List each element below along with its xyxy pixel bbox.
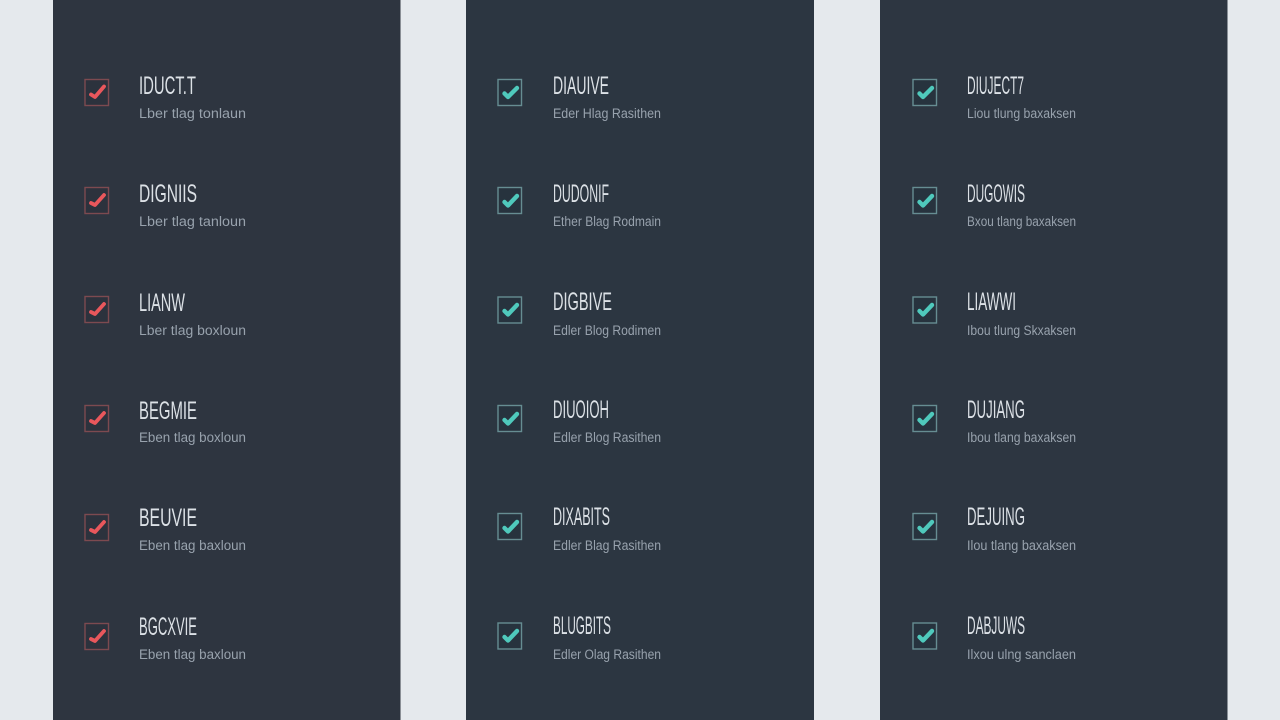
right item 5: Ilou tlang baxaksen: [967, 538, 1076, 553]
left item 4: Eben tlag boxloun: [139, 430, 246, 445]
right item 2: DUGOWIS: [967, 180, 1025, 208]
right item 2: [913, 180, 1076, 229]
right item 1: DIUJECT7: [967, 72, 1024, 100]
left item 2: [85, 180, 246, 229]
right panel background: [880, 0, 1228, 720]
right item 2: Bxou tlang baxaksen: [967, 214, 1076, 229]
middle item 1: DIAUIVE: [553, 72, 609, 100]
right item 6: [913, 612, 1076, 662]
middle item 1: Eder Hlag Rasithen: [553, 106, 661, 121]
left panel background: [53, 0, 400, 720]
middle item 5: [498, 503, 661, 553]
left item 5: BEUVIE: [139, 504, 197, 532]
right item 1: [913, 72, 1076, 121]
left item 6: [85, 613, 246, 662]
left item 2: Lber tlag tanloun: [139, 214, 246, 229]
left item 4: [85, 397, 246, 445]
left item 4: BEGMIE: [139, 397, 197, 425]
right item 4: Ibou tlang baxaksen: [967, 430, 1076, 445]
middle item 2: Ether Blag Rodmain: [553, 214, 661, 229]
right item 3: Ibou tlung Skxaksen: [967, 323, 1076, 338]
left item 2: DIGNIIS: [139, 180, 197, 208]
right item 5: [913, 503, 1076, 553]
middle item 3: [498, 288, 661, 338]
right item 1: Liou tlung baxaksen: [967, 106, 1076, 121]
left item 3: LIANW: [139, 289, 185, 317]
panel: left checklist (red): [53, 0, 400, 720]
middle item 4: Edler Blog Rasithen: [553, 430, 661, 445]
middle item 3: DIGBIVE: [553, 288, 612, 316]
right item 4: DUJIANG: [967, 396, 1025, 424]
right item 6: DABJUWS: [967, 612, 1025, 640]
middle item 5: Edler Blag Rasithen: [553, 538, 661, 553]
right item 4: [913, 396, 1076, 445]
middle item 6: Edler Olag Rasithen: [553, 647, 661, 662]
right item 3: LIAWWI: [967, 288, 1016, 316]
left item 5: [85, 504, 246, 553]
middle item 6: BLUGBITS: [553, 612, 611, 640]
left item 5: Eben tlag baxloun: [139, 538, 246, 553]
left item 6: Eben tlag baxloun: [139, 647, 246, 662]
middle item 1: [498, 72, 661, 121]
right item 3: [913, 288, 1076, 338]
right item 6: Ilxou ulng sanclaen: [967, 647, 1076, 662]
left item 1: IDUCT.T: [139, 72, 196, 100]
middle item 6: [498, 612, 661, 662]
panel: middle checklist (teal): [466, 0, 814, 720]
right item 5: DEJUING: [967, 503, 1025, 531]
middle item 3: Edler Blog Rodimen: [553, 323, 661, 338]
panel: right checklist (teal): [880, 0, 1228, 720]
middle item 2: DUDONIF: [553, 180, 609, 208]
left item 1: Lber tlag tonlaun: [139, 106, 246, 121]
middle item 5: DIXABITS: [553, 503, 610, 531]
middle panel background: [466, 0, 814, 720]
left item 3: Lber tlag boxloun: [139, 323, 246, 338]
middle item 4: [498, 396, 661, 445]
left item 6: BGCXVIE: [139, 613, 197, 641]
left item 3: [85, 289, 246, 338]
middle item 2: [498, 180, 661, 229]
middle item 4: DIUOIOH: [553, 396, 609, 424]
left item 1: [85, 72, 246, 121]
